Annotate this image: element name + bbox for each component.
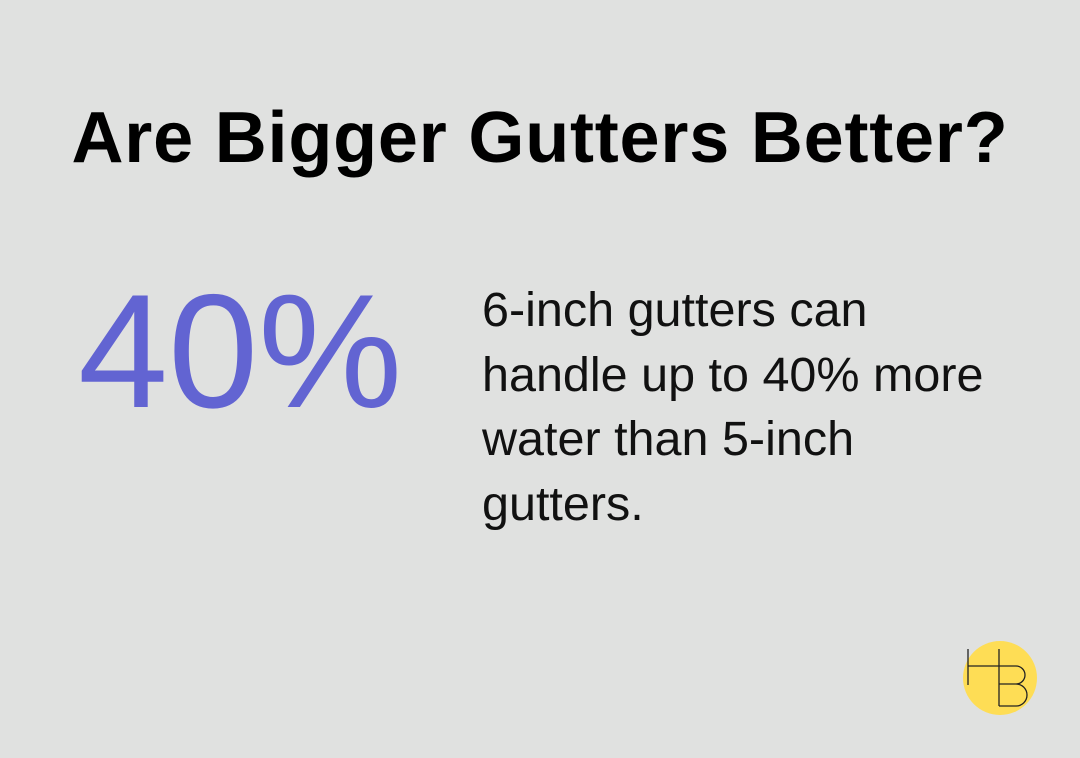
description text: gutters. <box>482 476 644 530</box>
icon: logo <box>963 641 1037 715</box>
description text <box>482 283 984 530</box>
description text: 6-inch gutters can <box>482 283 868 337</box>
title: Are Bigger Gutters Better? <box>72 98 1008 178</box>
description text: water than 5-inch <box>482 412 854 466</box>
big statistic: 40% <box>78 261 402 442</box>
description text: handle up to 40% more <box>482 348 984 402</box>
